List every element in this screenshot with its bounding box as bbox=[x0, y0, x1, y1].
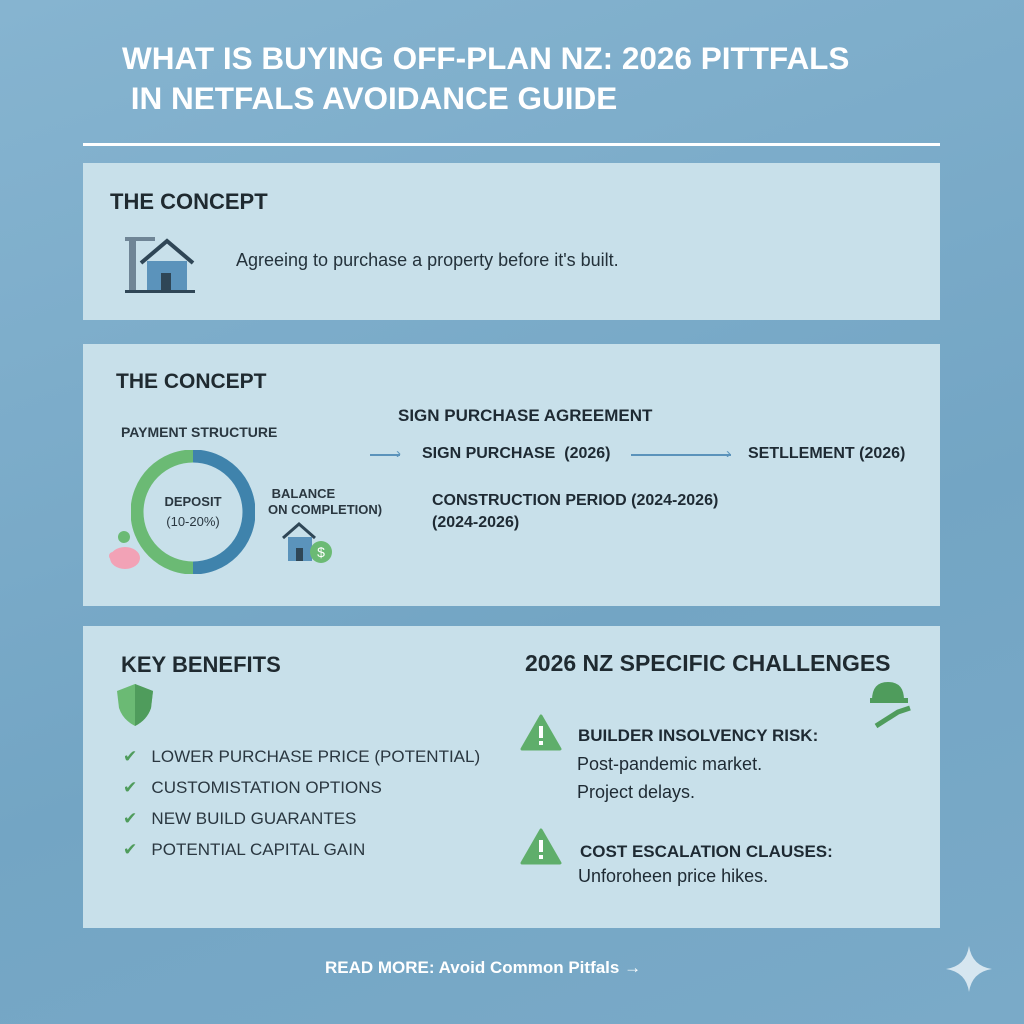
text: definition: Agreeing to purchase a property before it's built. bbox=[236, 250, 619, 270]
timeline: › bbox=[726, 445, 731, 462]
title: IN NETFALS AVOIDANCE GUIDE bbox=[131, 80, 617, 116]
panel: benefits and challenges bbox=[83, 626, 940, 928]
chart: donut: DEPOSIT bbox=[164, 494, 222, 509]
label: balance: ON COMPLETION) bbox=[268, 502, 382, 517]
timeline: SETLLEMENT (2026) bbox=[748, 445, 905, 462]
footer link: READ MORE: Avoid Common Pitfals → bbox=[325, 958, 641, 977]
icon: house with dollar bbox=[282, 522, 332, 563]
timeline: CONSTRUCTION PERIOD (2024-2026) bbox=[432, 492, 718, 509]
timeline: › bbox=[396, 445, 401, 462]
label: balance: BALANCE bbox=[272, 486, 335, 501]
list: benefits: ✔ CUSTOMISTATION OPTIONS bbox=[123, 778, 382, 797]
label: balance bbox=[268, 486, 382, 517]
timeline bbox=[370, 406, 905, 531]
heading: key benefits: KEY BENEFITS bbox=[121, 652, 281, 677]
challenge 1: Post-pandemic market. bbox=[577, 754, 762, 774]
icon: shield bbox=[117, 684, 153, 726]
challenge 1 bbox=[520, 714, 818, 802]
timeline: SIGN PURCHASE (2026) bbox=[422, 445, 610, 462]
title: WHAT IS BUYING OFF-PLAN NZ: 2026 PITTFALS bbox=[122, 40, 849, 76]
panel: payment structure bbox=[83, 344, 940, 606]
title bbox=[122, 40, 849, 116]
icon: helmet and wrench bbox=[870, 682, 911, 728]
challenge 2: COST ESCALATION CLAUSES: bbox=[580, 842, 833, 861]
challenge 2 bbox=[520, 828, 833, 886]
icon: sparkle bbox=[946, 946, 992, 992]
timeline: SIGN PURCHASE AGREEMENT bbox=[398, 406, 652, 425]
challenge 1: BUILDER INSOLVENCY RISK: bbox=[578, 726, 818, 745]
chart: donut: (10-20%) bbox=[166, 514, 220, 529]
list: benefits: ✔ LOWER PURCHASE PRICE (POTENTIAL) bbox=[123, 747, 480, 766]
icon: house with crane bbox=[125, 237, 195, 293]
list: benefits: ✔ NEW BUILD GUARANTES bbox=[123, 809, 356, 828]
icon: house with dollar: $ bbox=[317, 544, 325, 560]
heading: THE CONCEPT bbox=[116, 370, 267, 393]
challenge 1: Project delays. bbox=[577, 782, 695, 802]
list: benefits bbox=[123, 747, 480, 859]
icon: piggy bank bbox=[109, 531, 140, 569]
heading: the concept: THE CONCEPT bbox=[110, 189, 268, 214]
panel: concept bbox=[83, 163, 940, 320]
label: payment structure: PAYMENT STRUCTURE bbox=[121, 424, 277, 440]
heading: challenges: 2026 NZ SPECIFIC CHALLENGES bbox=[525, 650, 891, 676]
challenge 2: Unforoheen price hikes. bbox=[578, 866, 768, 886]
timeline: (2024-2026) bbox=[432, 514, 519, 531]
chart: donut bbox=[131, 450, 255, 574]
list: benefits: ✔ POTENTIAL CAPITAL GAIN bbox=[123, 840, 365, 859]
